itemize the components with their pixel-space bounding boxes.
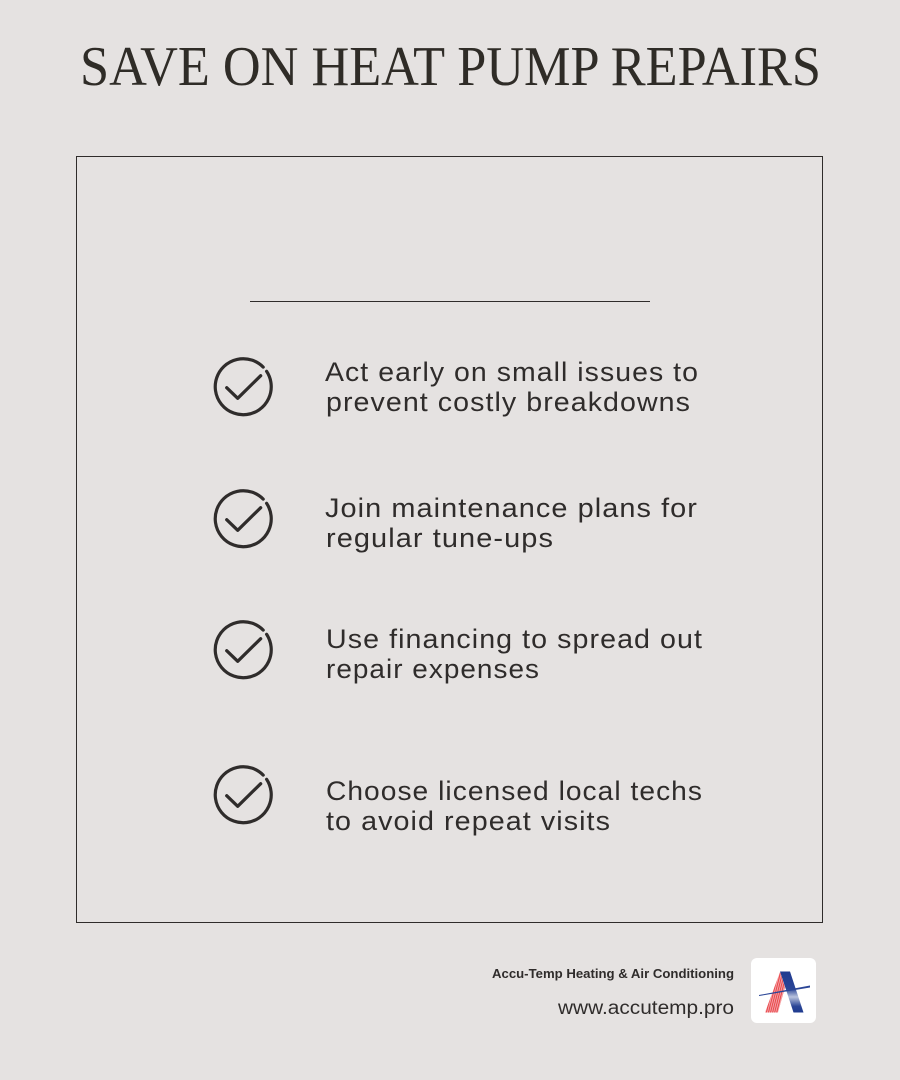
icon: check circle 3: [215, 622, 271, 678]
tip 3: [215, 622, 703, 684]
title: SAVE ON HEAT PUMP REPAIRS: [80, 36, 821, 98]
text: tip 2 line 1: Join maintenance plans for: [325, 493, 698, 523]
text: tip 1 line 2: prevent costly breakdowns: [326, 387, 691, 417]
text: tip 4 line 2: to avoid repeat visits: [326, 806, 611, 836]
icon: check circle 2: [215, 491, 271, 547]
tip 2: [215, 491, 698, 553]
text: tip 3 line 1: Use financing to spread out: [326, 624, 703, 654]
tip 4: [215, 767, 703, 836]
website url: www.accutemp.pro: [557, 998, 734, 1019]
panel: tips frame: [76, 156, 822, 922]
text: tip 4 line 1: Choose licensed local techs: [326, 776, 703, 806]
tip 1: [215, 357, 699, 417]
icon: check circle 4: [215, 767, 271, 823]
icon: company logo: [751, 958, 816, 1023]
text: tip 2 line 2: regular tune-ups: [326, 523, 554, 553]
company name: Accu-Temp Heating & Air Conditioning: [492, 967, 734, 981]
panel divider line: [250, 301, 650, 302]
icon: check circle 1: [215, 359, 271, 415]
text: tip 1 line 1: Act early on small issues to: [325, 357, 699, 387]
text: tip 3 line 2: repair expenses: [326, 654, 540, 684]
